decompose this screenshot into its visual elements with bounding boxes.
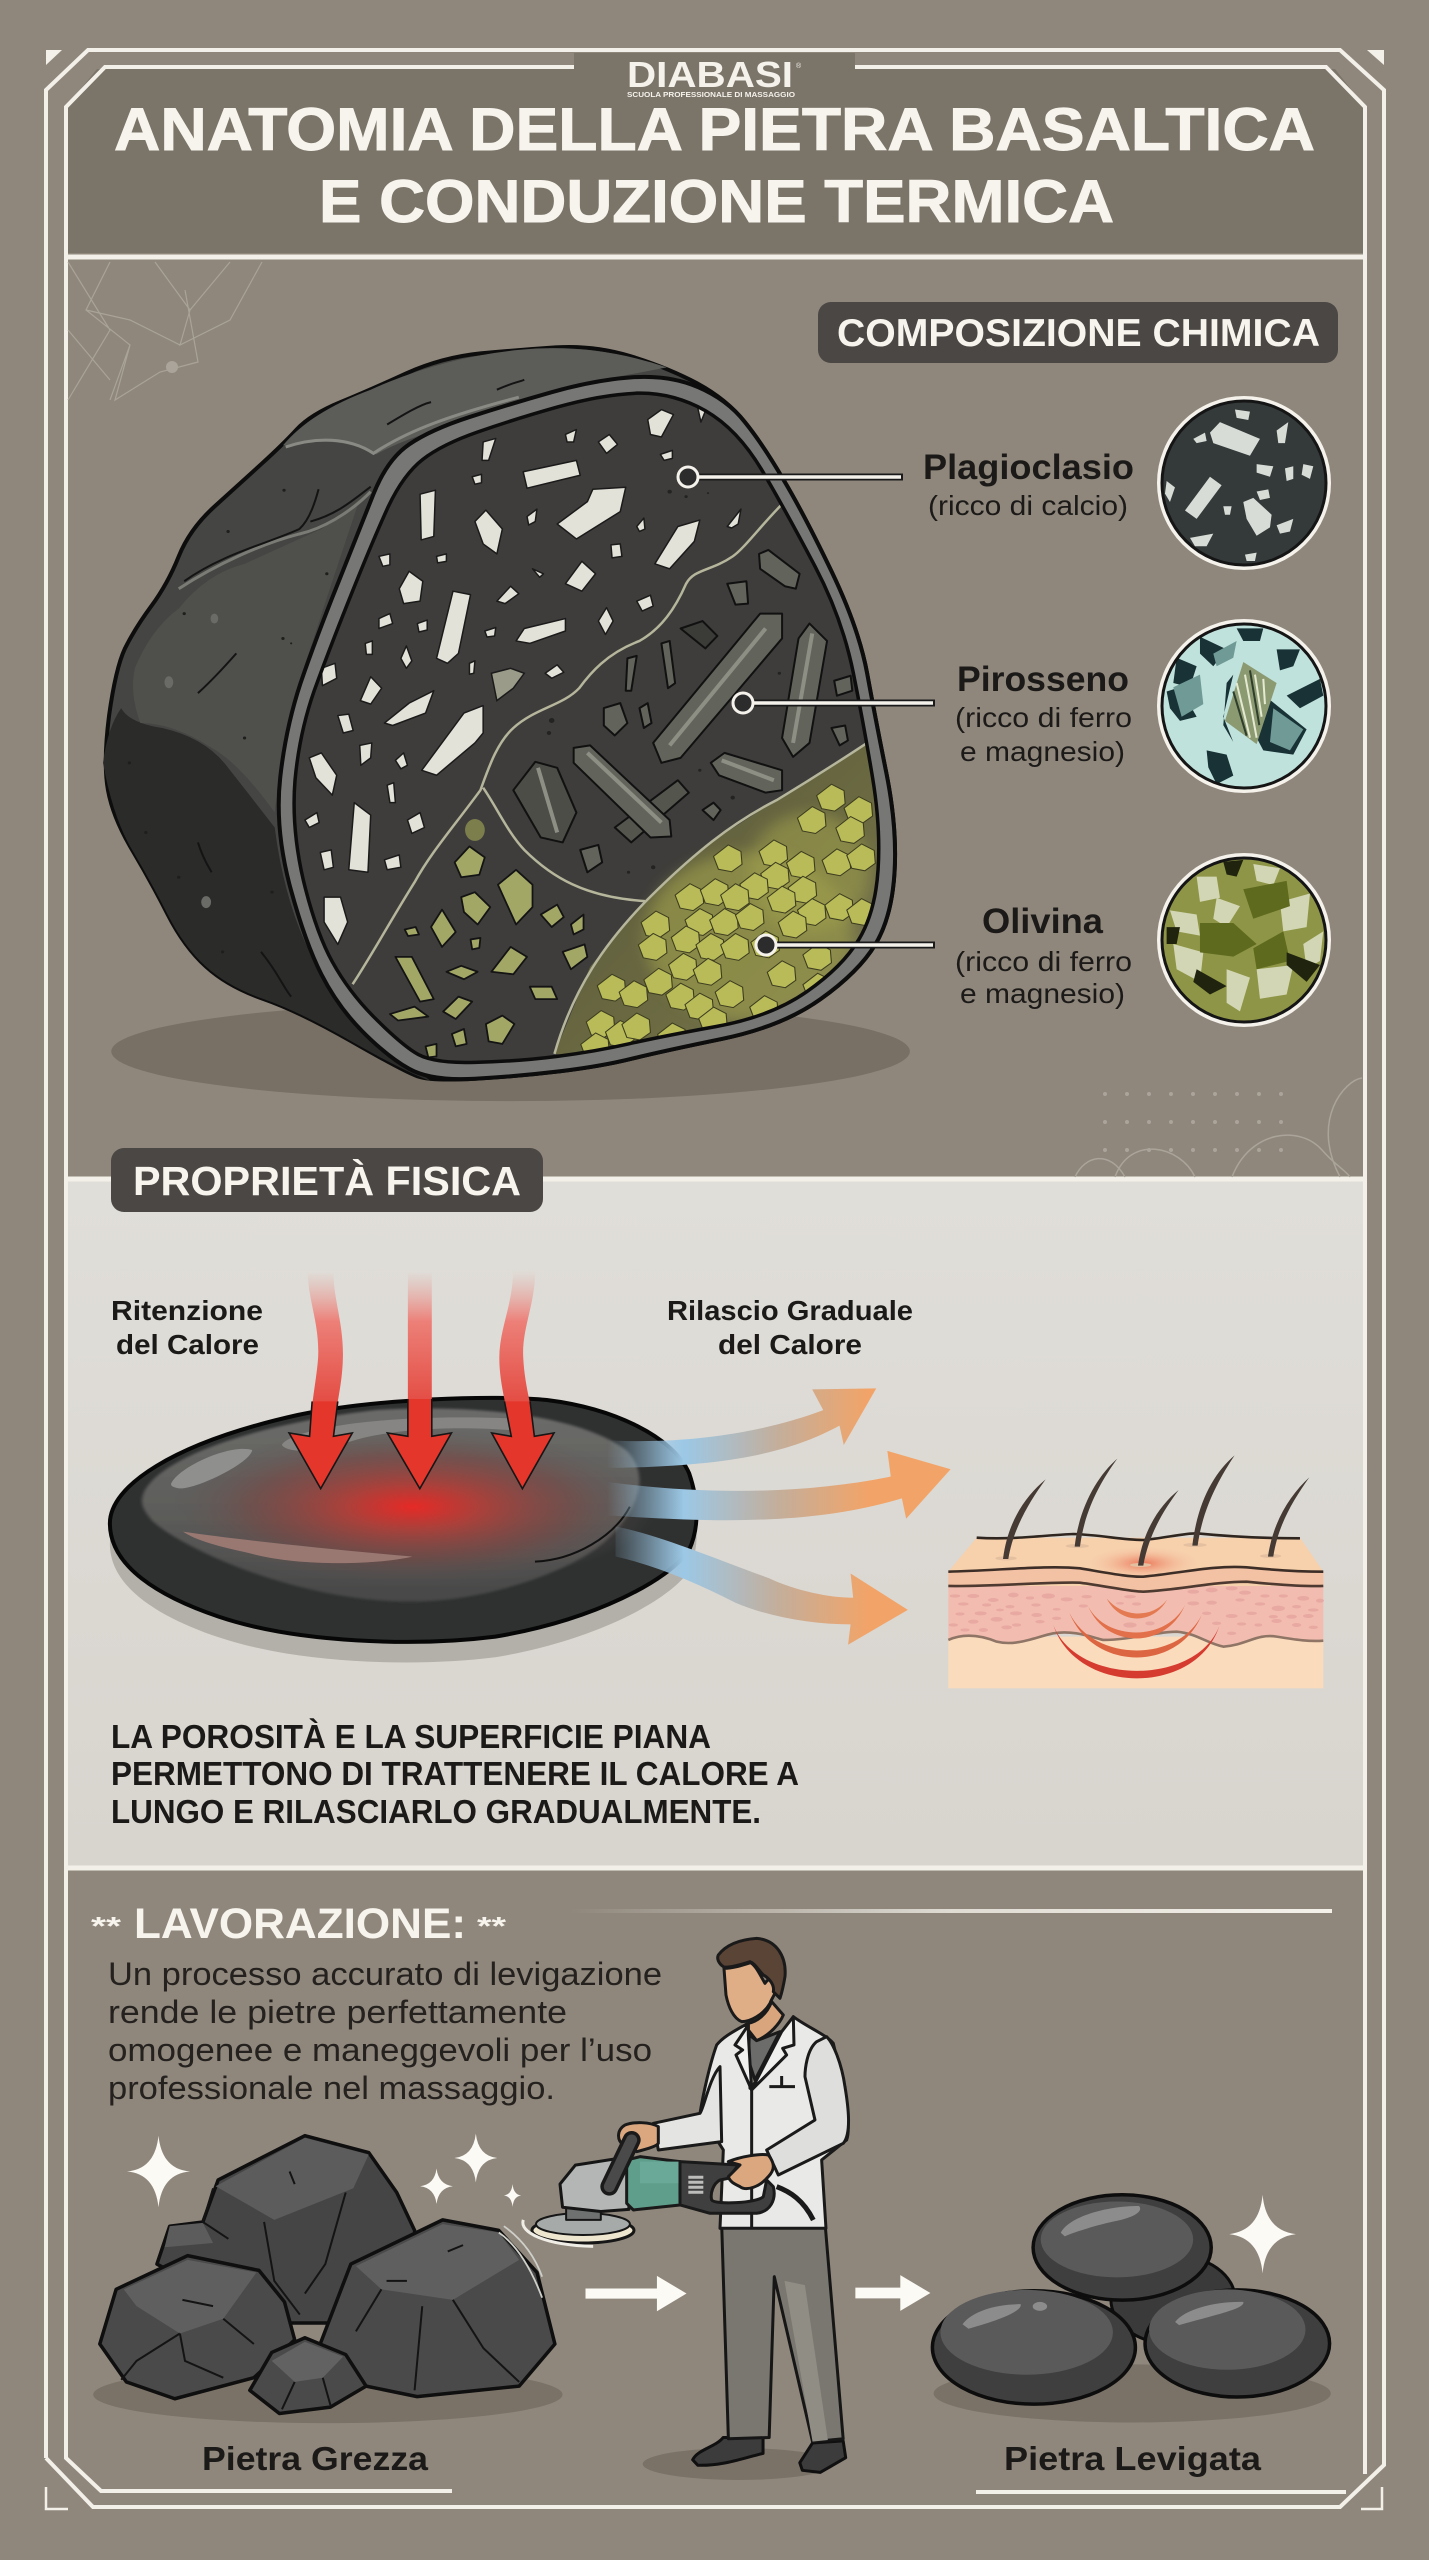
lavorazione description: omogenee e maneggevoli per l’uso bbox=[108, 2032, 652, 2068]
label: olivina bbox=[955, 902, 1132, 1009]
label: olivina: Olivina bbox=[982, 902, 1104, 941]
heading: lavorazione: ** bbox=[477, 1911, 507, 1941]
polished stone: left bbox=[932, 2290, 1135, 2404]
explanatory text: porosita: LUNGO E RILASCIARLO GRADUALMENTE. bbox=[111, 1793, 761, 1830]
lavorazione description bbox=[108, 1956, 662, 2106]
label: olivina: (ricco di ferro bbox=[955, 946, 1132, 977]
label: olivina: e magnesio) bbox=[960, 978, 1125, 1009]
rock body bbox=[106, 347, 895, 1080]
skin cross-section illustration bbox=[948, 1455, 1324, 1688]
rock ground shadow bbox=[111, 1002, 910, 1101]
arrow: man to polished stone bbox=[855, 2275, 930, 2311]
label: plagioclasio: Plagioclasio bbox=[923, 448, 1134, 487]
polished stone: right bbox=[1145, 2289, 1330, 2397]
decorative dots and arcs bottom right bbox=[1103, 1092, 1283, 1152]
polisher disc bbox=[532, 2218, 634, 2243]
raw stones, sparkles, arrow bbox=[93, 2134, 687, 2423]
raw stone: back bbox=[157, 2136, 417, 2323]
raw stone: small bbox=[250, 2338, 366, 2413]
label: plagioclasio: (ricco di calcio) bbox=[928, 490, 1128, 521]
polished stone: back bbox=[1111, 2255, 1235, 2344]
stone illustration bbox=[110, 1398, 697, 1662]
raw stone: right bbox=[320, 2220, 555, 2397]
man with polishing tool bbox=[523, 1938, 849, 2480]
lavorazione description: rende le pietre perfettamente bbox=[108, 1994, 567, 2030]
polished stones, second arrow bbox=[855, 2195, 1331, 2422]
micrograph: pirosseno bbox=[1157, 619, 1331, 793]
logo: ® bbox=[796, 62, 802, 70]
callout leader: pirosseno bbox=[733, 693, 935, 713]
label: pirosseno bbox=[955, 660, 1132, 767]
heading: lavorazione: ** bbox=[91, 1911, 122, 1941]
label: pirosseno: e magnesio) bbox=[960, 736, 1125, 767]
label: pietra grezza: Pietra Grezza bbox=[202, 2440, 429, 2477]
polished stone: top bbox=[1033, 2195, 1211, 2300]
label: ritenzione del calore: del Calore bbox=[116, 1329, 259, 1360]
olivine cluster bbox=[581, 784, 875, 1060]
zone boundary lines bbox=[353, 504, 867, 1054]
olivine crystals scattered bbox=[390, 846, 587, 1057]
release arrow: middle bbox=[607, 1451, 951, 1520]
label: rilascio graduale del calore: del Calore bbox=[718, 1329, 862, 1360]
title: ANATOMIA DELLA PIETRA BASALTICA bbox=[114, 96, 1315, 163]
label: plagioclasio bbox=[923, 448, 1134, 521]
explanatory text: porosita: PERMETTONO DI TRATTENERE IL CALORE A bbox=[111, 1755, 799, 1792]
heading: composizione chimica bbox=[818, 302, 1338, 363]
lavorazione description: Un processo accurato di levigazione bbox=[108, 1956, 662, 1992]
cut face interior bbox=[296, 394, 877, 1061]
cut face rim bbox=[279, 377, 895, 1079]
heading: composizione chimica: COMPOSIZIONE CHIMICA bbox=[837, 312, 1320, 355]
polished stones shadow bbox=[934, 2364, 1331, 2422]
man legs bbox=[523, 2157, 846, 2480]
title: E CONDUZIONE TERMICA bbox=[319, 168, 1114, 235]
heading: lavorazione: LAVORAZIONE: bbox=[134, 1900, 466, 1948]
man upper body bbox=[609, 1938, 849, 2228]
lavorazione description: professionale nel massaggio. bbox=[108, 2070, 555, 2106]
olivine zone bbox=[556, 746, 877, 1054]
basalt rock cross-section illustration bbox=[103, 347, 910, 1101]
plagioclase crystals bbox=[305, 405, 741, 944]
arrow: raw stone to man bbox=[586, 2276, 687, 2311]
label: pirosseno: Pirosseno bbox=[957, 660, 1129, 699]
release arrow: bottom bbox=[616, 1526, 908, 1645]
physical properties panel background bbox=[66, 1180, 1365, 1867]
label: ritenzione del calore bbox=[111, 1295, 263, 1360]
label: rilascio graduale del calore bbox=[667, 1295, 913, 1360]
heat arrow: left bbox=[289, 1273, 352, 1489]
heading: proprieta fisica bbox=[111, 1148, 543, 1212]
callout leader: plagioclasio bbox=[678, 467, 903, 487]
hot stone with heat arrows bbox=[110, 1271, 1324, 1688]
callout leader: olivina bbox=[756, 935, 935, 955]
logo: SCUOLA PROFESSIONALE DI MASSAGGIO bbox=[627, 92, 796, 99]
heading: lavorazione bbox=[91, 1900, 1332, 1948]
sparkles bbox=[127, 2134, 521, 2207]
raw stones ground shadow bbox=[93, 2366, 563, 2423]
release arrow: top bbox=[607, 1388, 876, 1468]
raw stone: left bbox=[100, 2256, 295, 2399]
label: rilascio graduale del calore: Rilascio Graduale bbox=[667, 1295, 913, 1326]
explanatory text: porosita bbox=[111, 1718, 799, 1830]
label: pirosseno: (ricco di ferro bbox=[955, 702, 1132, 733]
header band bbox=[66, 53, 1365, 253]
heat arrow: right bbox=[492, 1271, 554, 1489]
logo: DIABASI bbox=[627, 54, 793, 95]
label: pietra levigata: Pietra Levigata bbox=[1004, 2440, 1262, 2477]
title bbox=[114, 96, 1315, 235]
micrograph: plagioclasio bbox=[1157, 396, 1331, 570]
micrograph: olivina bbox=[1157, 853, 1331, 1027]
pyroxene crystals bbox=[513, 550, 852, 872]
heading: proprieta fisica: PROPRIETÀ FISICA bbox=[133, 1158, 521, 1204]
explanatory text: porosita: LA POROSITÀ E LA SUPERFICIE PIANA bbox=[111, 1718, 711, 1755]
sparkle bbox=[1229, 2195, 1296, 2273]
heat arrow: centre bbox=[387, 1273, 451, 1489]
label: ritenzione del calore: Ritenzione bbox=[111, 1295, 263, 1326]
decorative network lines top left bbox=[68, 262, 262, 400]
